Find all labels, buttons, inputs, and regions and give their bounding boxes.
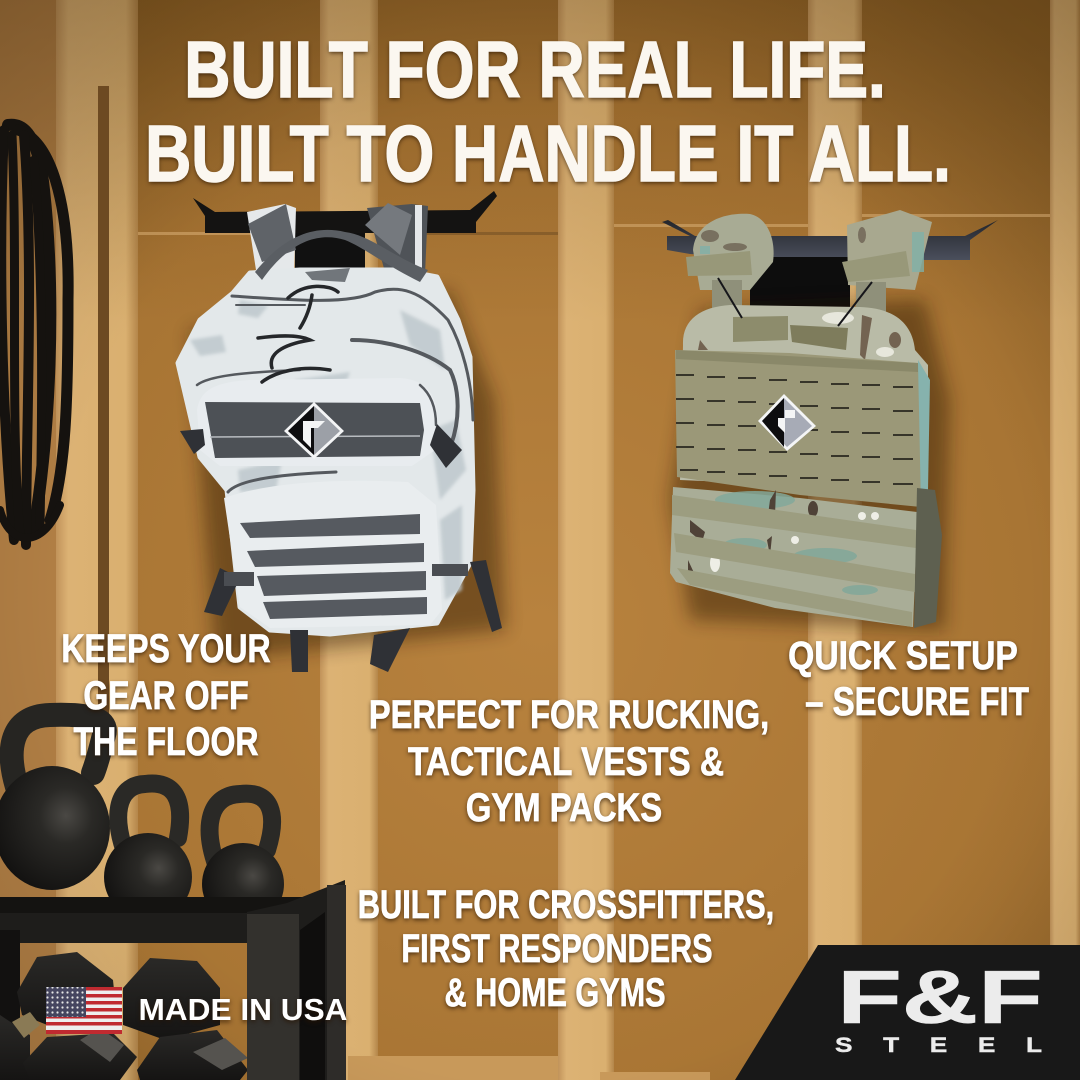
- coiled rope: [0, 125, 68, 545]
- callout: keeps your gear off the floor: THE FLOOR: [74, 720, 258, 764]
- logo wordmark: F&F: [837, 955, 1043, 1039]
- made in usa label: MADE IN USA: [138, 992, 348, 1027]
- icon: american flag: [46, 987, 122, 1034]
- laser-cut panel: [675, 350, 921, 507]
- buckles and straps: [180, 424, 502, 672]
- callout: keeps your gear off the floor: GEAR OFF: [83, 674, 249, 718]
- rucksack body: [178, 270, 473, 634]
- callout: perfect for rucking: TACTICAL VESTS &: [408, 740, 724, 784]
- callout: built for crossfitters: FIRST RESPONDERS: [401, 927, 713, 971]
- plate carrier vest: [670, 210, 950, 630]
- kettlebells: [0, 715, 284, 925]
- logo subtitle: STEEL: [835, 1034, 1073, 1057]
- title: [145, 25, 951, 198]
- logo panel background: [735, 945, 1080, 1080]
- callout: perfect for rucking: PERFECT FOR RUCKING,: [369, 693, 769, 737]
- left hanger rack: [193, 191, 497, 233]
- callout: quick setup: – SECURE FIT: [805, 680, 1029, 724]
- callout: perfect for rucking: [368, 693, 770, 830]
- lower camo pouch: [670, 487, 917, 627]
- vest logo patch: [758, 394, 816, 451]
- weight rack and dumbbells: [0, 880, 346, 1080]
- backpack: [178, 203, 505, 672]
- callout: quick setup: [786, 634, 1032, 724]
- bar leaning against wall: [98, 86, 109, 736]
- backpack logo patch: [284, 402, 344, 459]
- callout: perfect for rucking: GYM PACKS: [466, 786, 662, 830]
- drawcords: [258, 286, 338, 382]
- callout: keeps your gear off the floor: [60, 627, 272, 764]
- callout: keeps your gear off the floor: KEEPS YOUR: [61, 627, 271, 671]
- callout: quick setup: QUICK SETUP: [788, 634, 1018, 678]
- callout: built for crossfitters: & HOME GYMS: [444, 971, 666, 1015]
- shoulder straps: [693, 214, 774, 290]
- callout: built for crossfitters: [356, 883, 775, 1015]
- front patch panel: [205, 402, 424, 458]
- title: BUILT TO HANDLE IT ALL.: [145, 109, 951, 198]
- callout: built for crossfitters: BUILT FOR CROSSFITTERS,: [358, 883, 774, 927]
- molle webbing: [240, 514, 427, 619]
- title: BUILT FOR REAL LIFE.: [184, 25, 886, 114]
- upper camo panel: [680, 305, 928, 490]
- right hanger rack: [662, 220, 998, 309]
- logo: F&F Steel: [835, 955, 1073, 1057]
- zipper seams: [197, 289, 473, 492]
